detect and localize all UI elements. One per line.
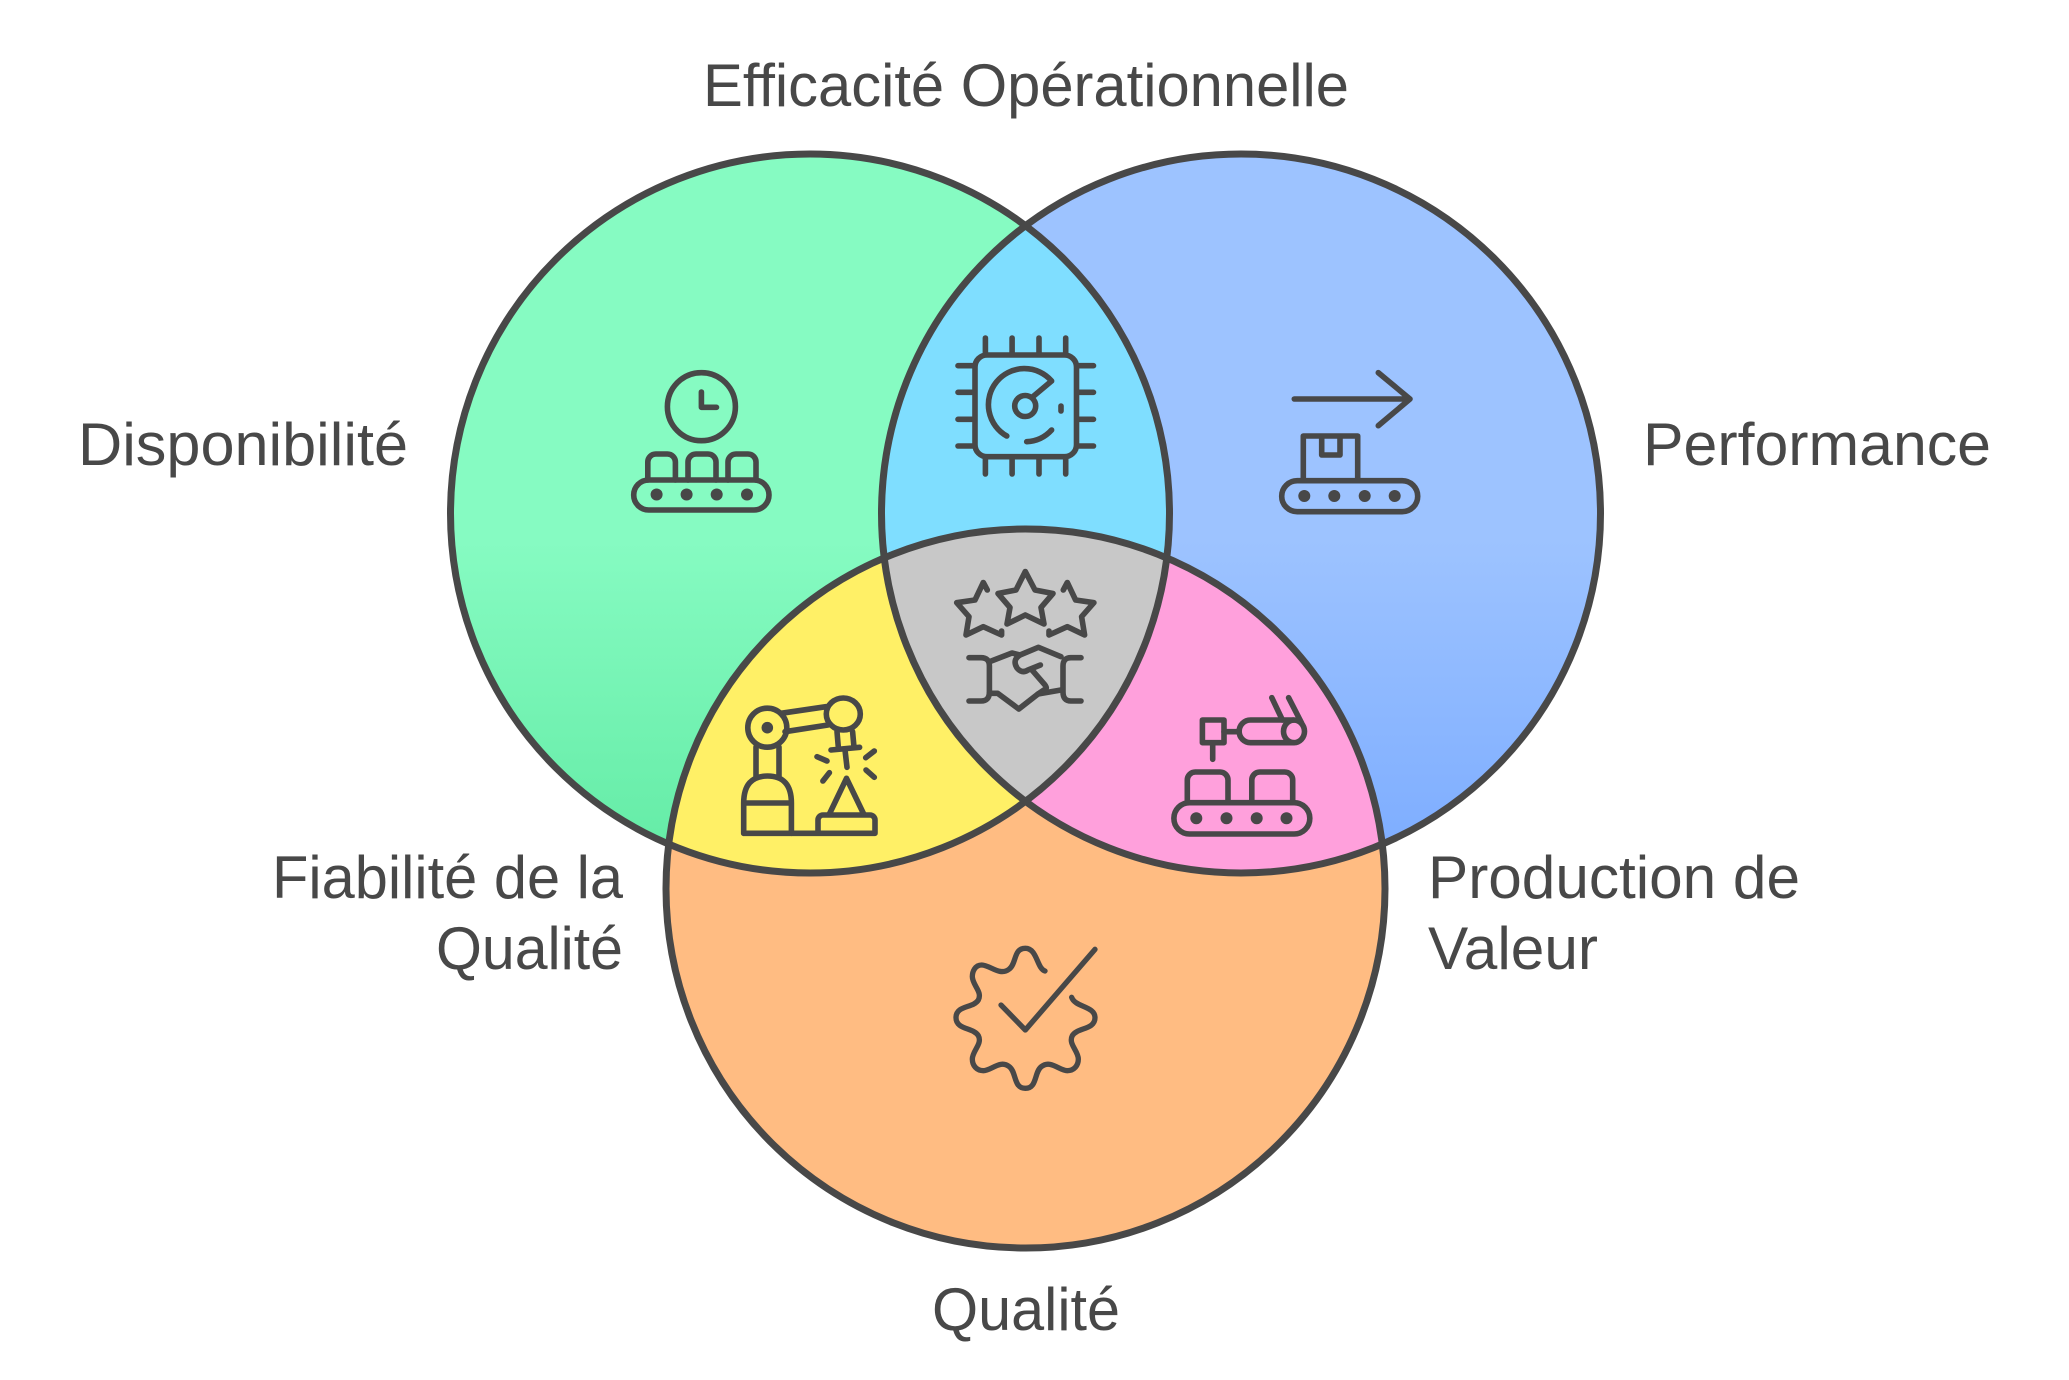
overlap: Fiabilité de la Qualité (672, 563, 1020, 870)
icon: robot arm (744, 698, 875, 833)
circle fill: Performance (882, 154, 1600, 873)
icon: three stars and handshake (957, 572, 1094, 709)
icon: quality badge with check (956, 948, 1095, 1088)
label: Fiabilité de la Qualité: Qualité (436, 915, 623, 982)
circle fill: Qualité (666, 529, 1385, 1248)
overlap: centre (888, 532, 1163, 797)
label: Qualité: Qualité (932, 1276, 1120, 1343)
label: Performance: Performance (1643, 411, 1991, 478)
label: Production de Valeur: Production de (1428, 844, 1800, 911)
circle fill: Disponibilité (450, 154, 1170, 873)
label: Production de Valeur: Valeur (1428, 915, 1598, 982)
overlap: Efficacité Opérationnelle (885, 230, 1166, 553)
label: Fiabilité de la Qualité: Fiabilité de la (272, 844, 624, 911)
label: Production de Valeur (1428, 844, 1800, 982)
icon: chip with gauge (958, 338, 1094, 474)
icon: machine over conveyor (1174, 698, 1310, 834)
label: Disponibilité: Disponibilité (78, 411, 408, 478)
circle outlines (450, 154, 1600, 1248)
overlap: Production de Valeur (1031, 563, 1378, 870)
label: Efficacité Opérationnelle: Efficacité Opérationnelle (703, 52, 1349, 119)
label: Fiabilité de la Qualité (272, 844, 624, 982)
icon: package on conveyor with arrow (1282, 373, 1418, 512)
icon: clock over conveyor (634, 373, 769, 510)
